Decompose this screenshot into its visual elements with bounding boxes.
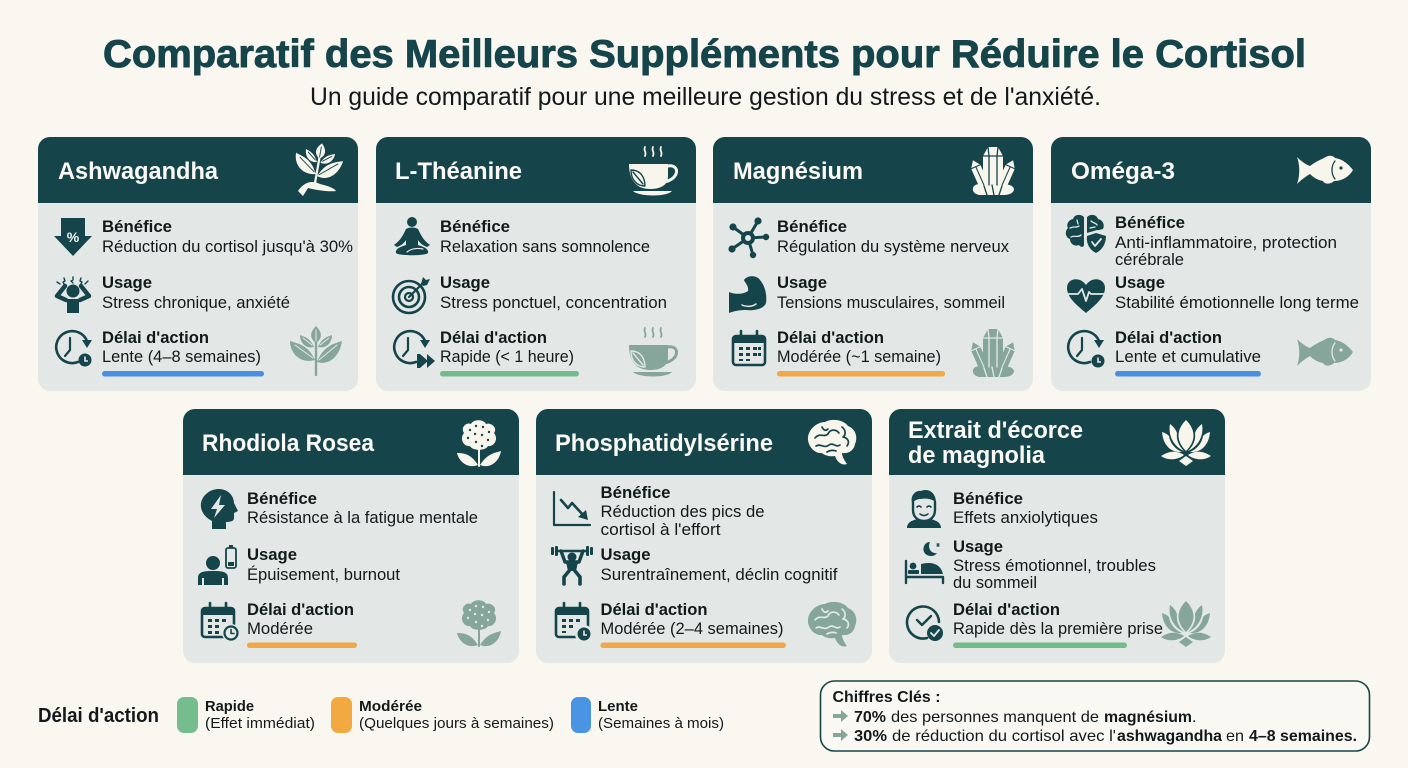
row: Bénéfice: Régulation du système nerveux (777, 238, 1010, 256)
icon: tea cup (629, 147, 677, 196)
row: Délai d'action: Délai d'action (247, 601, 354, 619)
speed bar: modérée (247, 642, 357, 648)
header: L-Théanine (376, 137, 696, 203)
icon: calendar clock (556, 603, 593, 643)
header: Phosphatidylsérine (536, 409, 872, 475)
row: Usage (906, 538, 1156, 592)
row: Bénéfice (728, 217, 1010, 258)
row: Usage (57, 274, 290, 313)
watermark: cup (629, 328, 677, 376)
legend: modérée: Modérée (359, 699, 422, 715)
header: Oméga-3 (1051, 137, 1371, 203)
icon: percent down arrow (54, 218, 92, 256)
row: Bénéfice: Bénéfice (440, 218, 510, 236)
row: Bénéfice: Réduction des pics de (600, 503, 764, 521)
legend: lente: (Semaines à mois) (598, 716, 724, 732)
header: Phosphatidylsérine: Phosphatidylsérine (555, 430, 773, 457)
header: Ashwagandha (38, 137, 358, 203)
icon: head with bolt (201, 489, 238, 529)
icon: calendar clock (202, 603, 240, 642)
watermark: brain (808, 602, 856, 647)
key figure: ashwagandha: de réduction du cortisol avec l' (892, 728, 1116, 745)
row: Bénéfice: Bénéfice (953, 490, 1023, 508)
key figure: magnésium: magnésium (1104, 709, 1192, 726)
watermark: fish (1297, 338, 1353, 366)
row: Bénéfice: Résistance à la fatigue mentale (247, 509, 478, 527)
header: Rhodiola Rosea: Rhodiola Rosea (202, 430, 375, 457)
row: Délai d'action (394, 329, 579, 376)
row: Usage: Usage (102, 274, 152, 292)
legend title: Délai d'action (38, 705, 159, 727)
header: Oméga-3: Oméga-3 (1071, 158, 1175, 185)
header: Magnésium (713, 137, 1033, 203)
key figure: ashwagandha: ashwagandha (1117, 728, 1222, 745)
key figure: ashwagandha (833, 728, 1357, 745)
title: Comparatif des Meilleurs Suppléments pour Réduire le Cortisol (103, 33, 1306, 76)
icon: weightlifter (551, 546, 593, 584)
row: Délai d'action (1068, 329, 1261, 376)
legend: rapide (177, 697, 315, 733)
row: Bénéfice (54, 218, 353, 256)
row: Bénéfice: Relaxation sans somnolence (440, 238, 650, 256)
panel: L-Théanine (376, 137, 696, 391)
row: Bénéfice: cortisol à l'effort (600, 521, 721, 539)
row: Bénéfice (394, 217, 650, 256)
row: Bénéfice (201, 489, 478, 529)
row: Délai d'action (202, 601, 357, 648)
row: Délai d'action (556, 601, 786, 648)
speed bar: rapide (440, 371, 579, 376)
row: Usage (1067, 274, 1359, 313)
row: Usage: Tensions musculaires, sommeil (777, 294, 1005, 312)
row: Usage (393, 274, 667, 313)
icon: tired person with battery (198, 545, 236, 585)
panel: Magnésium (713, 137, 1033, 391)
icon: bed and moon (906, 542, 943, 583)
header: Extrait d'écorce de magnolia: Extrait d'écorce (908, 417, 1083, 444)
icon: slow clock (56, 331, 92, 366)
panel: Phosphatidylsérine (536, 409, 872, 663)
row: Usage: Stress ponctuel, concentration (440, 294, 667, 312)
watermark: lotus (1161, 601, 1211, 647)
row: Délai d'action: Rapide (< 1 heure) (440, 348, 574, 366)
panel: Ashwagandha (38, 137, 358, 391)
watermark: rhodiola (457, 600, 501, 646)
row: Usage: Surentraînement, déclin cognitif (600, 566, 838, 584)
icon: muscle arm (729, 276, 766, 313)
header: L-Théanine: L-Théanine (395, 158, 522, 185)
key figure: ashwagandha: 4–8 semaines. (1249, 728, 1357, 745)
row: Usage: du sommeil (953, 574, 1037, 592)
watermark: crystal (968, 329, 1018, 377)
header: Magnésium: Magnésium (733, 158, 863, 185)
row: Usage (729, 274, 1005, 313)
header: Extrait d'écorce de magnolia: de magnolia (908, 442, 1046, 469)
icon: slow clock (1068, 331, 1104, 368)
panel: Extrait d'écorce de magnolia (889, 409, 1225, 663)
icon: lotus (1161, 420, 1211, 466)
row: Bénéfice: Bénéfice (247, 490, 317, 508)
speed bar: rapide (953, 642, 1127, 648)
icon: fast clock (394, 331, 435, 368)
row: Bénéfice: Bénéfice (777, 218, 847, 236)
row: Délai d'action: Lente (4–8 semaines) (102, 348, 261, 366)
row: Bénéfice: Bénéfice (600, 484, 670, 502)
row: Délai d'action: Modérée (2–4 semaines) (600, 620, 784, 638)
key figure: magnésium: . (1192, 709, 1196, 726)
row: Usage: Usage (777, 274, 827, 292)
row: Délai d'action: Rapide dès la première prise (953, 620, 1163, 638)
row: Usage: Stabilité émotionnelle long terme (1115, 294, 1359, 312)
panel: Oméga-3 (1051, 137, 1371, 391)
row: Délai d'action: Délai d'action (440, 329, 547, 347)
icon: stressed person (57, 277, 89, 313)
key figure: ashwagandha: 30% (854, 728, 887, 745)
legend: lente: Lente (598, 699, 638, 715)
subtitle: Un guide comparatif pour une meilleure gestion du stress et de l'anxiété. (310, 83, 1101, 111)
icon: target (393, 277, 430, 313)
icon: rhodiola flower (457, 420, 501, 466)
row: Bénéfice: Bénéfice (1115, 214, 1185, 232)
header: Rhodiola Rosea (183, 409, 519, 475)
row: Bénéfice: Anti-inflammatoire, protection (1115, 234, 1337, 252)
row: Bénéfice (554, 484, 764, 539)
row: Usage: Épuisement, burnout (247, 565, 400, 584)
callout: key figures (820, 681, 1370, 751)
legend: rapide: Rapide (205, 699, 254, 715)
row: Délai d'action: Modérée (~1 semaine) (777, 348, 941, 366)
row: Bénéfice (1066, 214, 1337, 269)
icon: nerve network (728, 217, 769, 258)
legend: lente (571, 697, 724, 733)
row: Usage: Usage (247, 546, 297, 564)
row: Délai d'action: Délai d'action (102, 329, 209, 347)
row: Délai d'action (907, 601, 1163, 648)
speed bar: lente (1115, 371, 1261, 376)
legend: modérée (331, 697, 554, 733)
row: Usage: Usage (600, 546, 650, 564)
icon: ashwagandha plant (291, 139, 346, 196)
panel: Rhodiola Rosea (183, 409, 519, 663)
row: Délai d'action (733, 329, 945, 376)
row: Délai d'action: Délai d'action (1115, 329, 1222, 347)
row: Usage (198, 545, 400, 585)
row: Délai d'action: Délai d'action (600, 601, 708, 619)
row: Bénéfice: Bénéfice (102, 218, 172, 236)
row: Délai d'action: Lente et cumulative (1115, 348, 1261, 366)
icon: calendar (733, 331, 765, 365)
row: Usage: Usage (953, 538, 1003, 556)
key figure: magnésium (833, 709, 1196, 726)
watermark: plant (290, 326, 342, 375)
key figure: ashwagandha: en (1226, 728, 1244, 745)
row: Bénéfice (907, 490, 1098, 528)
row: Bénéfice: Effets anxiolytiques (953, 509, 1098, 527)
row: Usage: Stress chronique, anxiété (102, 294, 290, 312)
speed bar: modérée (777, 371, 945, 376)
row: Bénéfice: cérébrale (1115, 251, 1184, 269)
icon: check clock (907, 607, 943, 641)
row: Délai d'action: Délai d'action (953, 601, 1060, 619)
callout: key figures: Chiffres Clés : (832, 689, 940, 706)
row: Usage (551, 546, 838, 584)
legend: modérée: (Quelques jours à semaines) (359, 716, 554, 732)
icon: falling chart (554, 492, 590, 525)
row: Délai d'action: Modérée (247, 620, 313, 638)
header: Ashwagandha: Ashwagandha (58, 158, 219, 185)
icon: crystal (968, 147, 1018, 195)
row: Délai d'action (56, 329, 264, 376)
legend (38, 697, 724, 733)
row: Usage: Stress émotionnel, troubles (953, 557, 1156, 575)
icon: calm face (907, 490, 941, 528)
row: Usage: Usage (440, 274, 490, 292)
icon: brain (808, 420, 856, 465)
key figure: magnésium: 70% (854, 709, 886, 726)
icon: brain shield (1066, 215, 1108, 256)
key figure: magnésium: des personnes manquent de (891, 709, 1099, 726)
speed bar: modérée (600, 642, 786, 648)
speed bar: lente (102, 371, 264, 376)
icon: heart pulse (1067, 279, 1105, 313)
row: Bénéfice: Réduction du cortisol jusqu'à 30% (102, 238, 353, 256)
icon: meditation (394, 217, 430, 255)
icon: fish (1297, 156, 1353, 184)
icon: percent down arrow: % (67, 229, 80, 245)
header: Extrait d'écorce de magnolia (889, 409, 1225, 475)
row: Usage: Usage (1115, 274, 1165, 292)
row: Délai d'action: Délai d'action (777, 329, 884, 347)
legend: rapide: (Effet immédiat) (205, 716, 315, 732)
